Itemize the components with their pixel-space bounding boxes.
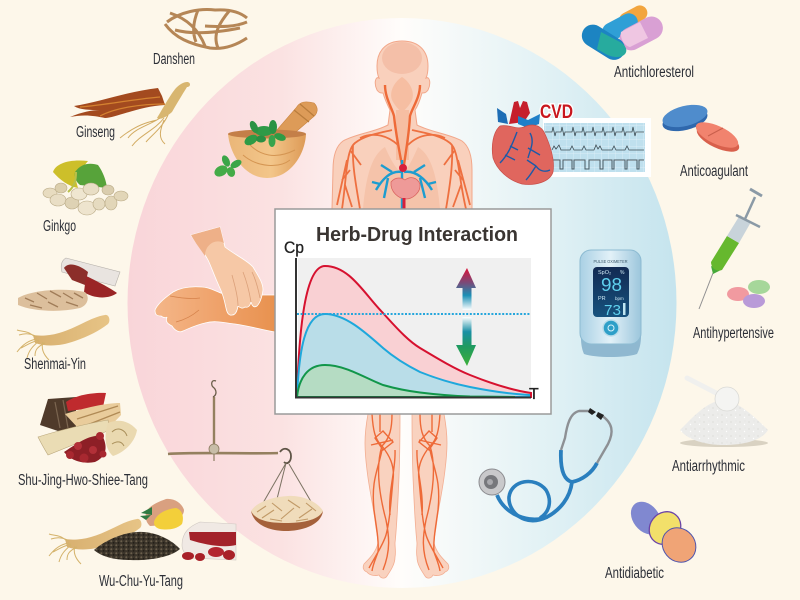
- drug: antiarrhythmic powder and scoop: [680, 378, 768, 447]
- CVD heart and ECG card: [492, 101, 651, 184]
- pulse oximeter: [580, 250, 641, 357]
- label: Danshen: Danshen: [153, 51, 195, 68]
- blue curve: [297, 314, 529, 397]
- drug: anticoagulant tablets: [660, 101, 743, 157]
- drug: antidiabetic tablets: [625, 496, 703, 569]
- Cp axis label: Cp: [284, 238, 304, 257]
- pulse oximeter: PULSE OXIMETER: [594, 259, 628, 264]
- down arrow: [456, 317, 476, 366]
- herb: wu-chu-yu-tang: [49, 499, 236, 564]
- herb: ginkgo: [43, 160, 128, 215]
- human body with circulatory system: [332, 41, 472, 578]
- mortar and pestle with herbs: [212, 102, 317, 179]
- green curve: [297, 365, 515, 397]
- label: Shenmai-Yin: Shenmai-Yin: [24, 356, 86, 373]
- balance scale with herb slices: [168, 381, 323, 531]
- dotted reference line: [297, 313, 530, 315]
- herb: shenmai-yin: [17, 258, 120, 360]
- T axis label: T: [529, 386, 539, 403]
- label: Antidiabetic: Antidiabetic: [605, 565, 664, 582]
- drug: antihypertensive syringe and pills: [699, 189, 770, 309]
- pulse oximeter: bpm: [615, 296, 624, 301]
- label: Ginkgo: Ginkgo: [43, 218, 76, 235]
- ECG card: [543, 118, 651, 177]
- pulse oximeter: SpO₂: [598, 270, 611, 276]
- pulse oximeter: %: [620, 270, 625, 276]
- label: Wu-Chu-Yu-Tang: Wu-Chu-Yu-Tang: [99, 573, 183, 590]
- label: Anticoagulant: Anticoagulant: [680, 163, 748, 180]
- label: Antiarrhythmic: Antiarrhythmic: [672, 458, 745, 475]
- result chart card: [275, 209, 551, 414]
- pulse oximeter: 73: [604, 302, 621, 319]
- label: Antichloresterol: Antichloresterol: [614, 64, 694, 81]
- red curve: [297, 266, 531, 397]
- pulse oximeter: 98: [601, 275, 622, 295]
- axes: [296, 258, 531, 398]
- pink to blue circle: [128, 18, 676, 588]
- pulse oximeter: PR: [598, 296, 606, 302]
- hands taking a pulse: [155, 227, 275, 332]
- chart title: Herb-Drug Interaction: [316, 223, 518, 246]
- drug: antichloresterol capsules: [578, 3, 667, 64]
- plot background: [298, 258, 531, 397]
- label: Shu-Jing-Hwo-Shiee-Tang: Shu-Jing-Hwo-Shiee-Tang: [18, 472, 148, 489]
- heart: [492, 101, 553, 184]
- herb: ginseng: [70, 82, 190, 146]
- stethoscope: [479, 408, 612, 521]
- label: Ginseng: Ginseng: [76, 124, 115, 141]
- herb: danshen: [165, 10, 247, 48]
- herb: shu-jing-hwo-shiee-tang: [38, 393, 137, 463]
- up arrow: [456, 268, 476, 310]
- CVD label: CVD: [540, 102, 573, 123]
